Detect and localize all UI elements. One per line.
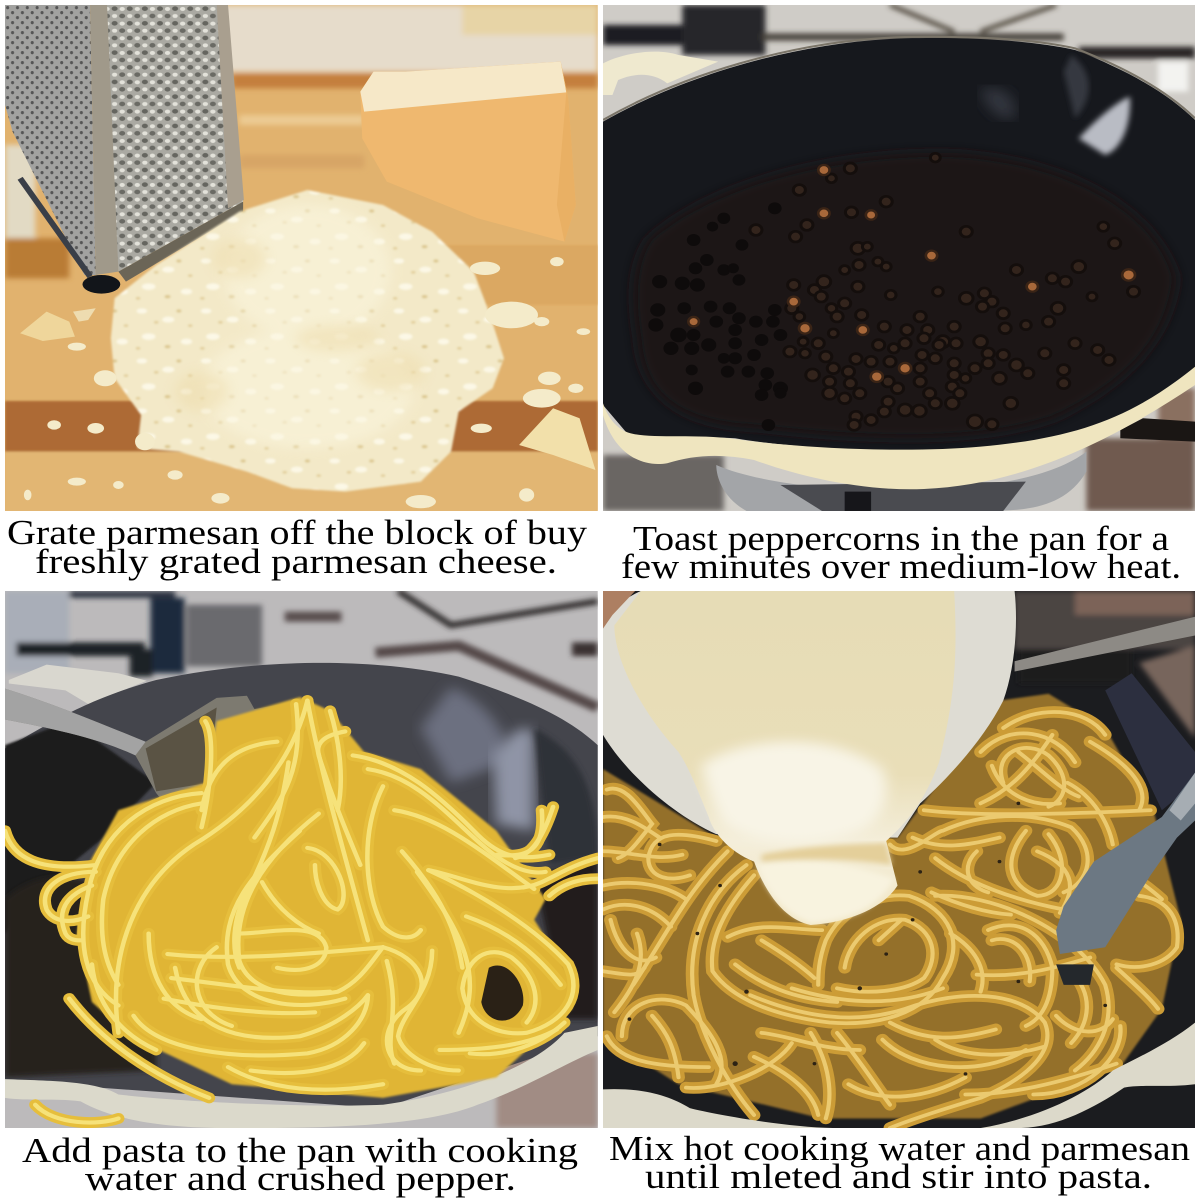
- text: caption step 3: Add pasta to the pan with cooking: [22, 1131, 578, 1170]
- stove background: [5, 591, 598, 1128]
- icon: burner: [716, 452, 1086, 511]
- text: caption step 3: [22, 1131, 578, 1198]
- icon: orange peppercorns: [688, 165, 1135, 382]
- icon: side handle: [9, 665, 147, 704]
- panel: mix sauce photo: [603, 591, 1195, 1128]
- blurred background: [5, 5, 598, 278]
- icon: dark left peppercorns: [648, 202, 788, 431]
- pan floor: [633, 153, 1177, 438]
- icon: serving spoon: [5, 688, 274, 797]
- text: caption step 2: [621, 519, 1181, 586]
- text: caption step 2: Toast peppercorns in the pan for a: [633, 519, 1170, 558]
- icon: tongs: [1015, 617, 1195, 985]
- icon: pan handle: [603, 52, 718, 95]
- icon: black side handle: [1120, 418, 1195, 442]
- icon: blue pan wall: [1105, 673, 1195, 810]
- icon: skillet: [603, 37, 1195, 453]
- text: caption step 4: until mleted and stir into pasta.: [645, 1157, 1152, 1196]
- text: caption step 1: [7, 513, 588, 581]
- icon: spaghetti: [5, 697, 598, 1123]
- text: caption step 3: water and crushed pepper.: [85, 1159, 516, 1198]
- icon: small cheese chunks: [20, 308, 595, 470]
- icon: skillet cream rim: [603, 367, 1195, 489]
- text: caption step 1: Grate parmesan off the block of buy: [7, 513, 588, 552]
- text: caption step 4: Mix hot cooking water and parmesan: [609, 1129, 1190, 1168]
- icon: skillet cream rim: [603, 1023, 1195, 1128]
- icon: grated parmesan pile: [24, 190, 590, 508]
- icon: peppercorns: [750, 153, 1140, 430]
- wall highlights: [1079, 97, 1130, 155]
- text: caption step 4: [609, 1129, 1190, 1196]
- icon: spaghetti with pepper: [603, 694, 1181, 1128]
- icon: pouring sauce: [614, 591, 956, 925]
- icon: white bowl: [603, 591, 1016, 838]
- icon: hand: [603, 591, 635, 629]
- icon: skillet: [5, 663, 598, 1108]
- icon: skillet cream rim: [5, 1026, 598, 1128]
- stove background: [1015, 591, 1195, 738]
- panel: add pasta photo: [5, 591, 598, 1128]
- text: caption step 1: freshly grated parmesan cheese.: [35, 542, 557, 581]
- gap: dark hole between strands: [481, 966, 523, 1021]
- panel: grate parmesan photo: [5, 5, 598, 511]
- panel: toast peppercorns photo: [603, 5, 1195, 511]
- stove background: [603, 5, 1195, 511]
- wood stripes: [5, 245, 598, 511]
- icon: box grater: [5, 5, 244, 294]
- text: caption step 2: few minutes over medium-low heat.: [621, 547, 1181, 586]
- icon: parmesan wedge: [360, 62, 576, 242]
